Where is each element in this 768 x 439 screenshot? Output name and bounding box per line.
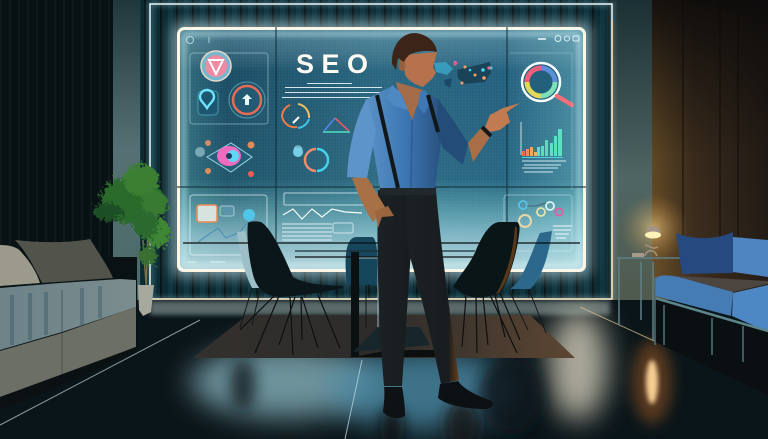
left sleeve [347, 99, 376, 178]
collar: left [387, 85, 408, 110]
pointing hand [485, 103, 520, 132]
floor seams [0, 307, 768, 439]
chair: back right [510, 231, 552, 333]
sofa underside [655, 298, 768, 395]
side table [617, 258, 680, 340]
face [403, 52, 437, 87]
plant [93, 164, 170, 285]
left hand [375, 206, 394, 228]
map: world data points [434, 62, 492, 88]
text block: chart notes [522, 158, 566, 172]
collar: right [418, 90, 432, 114]
chair: back left [237, 231, 260, 328]
plant pot [138, 285, 154, 316]
chair: front left [240, 221, 343, 355]
back wall: left dark panel [0, 0, 114, 320]
icon: glowing dot [243, 209, 255, 221]
icon: upload ring [229, 82, 265, 118]
icon: check gauge [282, 104, 309, 128]
floor [0, 300, 768, 439]
heading: SEO: SEO [296, 49, 368, 79]
table [183, 243, 580, 357]
panel: network nodes [504, 195, 572, 251]
icon: location pin [198, 90, 218, 115]
sofa base [0, 307, 136, 397]
panel: eye analytics [195, 140, 254, 177]
rug [193, 315, 575, 358]
line chart [198, 222, 248, 242]
sofa arm [105, 257, 137, 347]
pillow: light [0, 245, 40, 286]
pillow: dark [15, 239, 113, 283]
icon: triangle chart [323, 118, 350, 132]
back wall: central slats [140, 0, 620, 306]
right leg [405, 190, 459, 384]
bar chart [521, 122, 562, 156]
icon: document tile [197, 205, 217, 222]
lamp [632, 226, 661, 257]
left sofa [0, 239, 137, 410]
neon frame around the wall [150, 4, 612, 299]
sofa frame [655, 298, 768, 331]
watch [482, 127, 491, 136]
chair: front right [453, 222, 520, 353]
suspenders [377, 95, 398, 188]
left leg [377, 190, 420, 386]
back wall: right light column [613, 0, 653, 300]
panel: magnifier frame [510, 53, 572, 190]
belt [380, 187, 436, 195]
back wall: left light column [113, 0, 141, 300]
back wall: right wood panel [652, 0, 768, 300]
text block: small screen corner marks [186, 36, 225, 262]
lamp glow on wood [620, 194, 688, 262]
sofa seat [0, 279, 136, 350]
icon: small tile [220, 206, 234, 216]
shirt placket [411, 120, 412, 188]
left forearm [352, 177, 385, 222]
panel: top left icons [190, 51, 268, 124]
right shoe [438, 381, 493, 409]
right sleeve [437, 99, 468, 165]
chair: back centre [346, 237, 384, 328]
panel: line graph and data table [282, 193, 366, 240]
person [347, 33, 520, 418]
ear [398, 59, 406, 71]
icons: top right toolbar [538, 36, 579, 42]
glowing SEO screen [172, 22, 591, 277]
right forearm [468, 127, 490, 162]
pillow: second cushion [733, 237, 768, 277]
neck [396, 82, 423, 120]
left shoe [383, 387, 405, 418]
icon: magnifying glass [522, 63, 572, 105]
text block: SEO description lines [282, 84, 385, 98]
shirt [365, 86, 442, 188]
icon: donut ring [293, 146, 328, 171]
cushion: left seat [655, 275, 733, 316]
pillow: navy [676, 232, 733, 274]
sofa seat top [662, 275, 768, 292]
hair [392, 33, 437, 70]
right sofa [655, 232, 768, 395]
cushion: right seat [732, 285, 768, 332]
panel: bottom left chart [190, 195, 267, 255]
icon: shield badge [201, 51, 231, 81]
